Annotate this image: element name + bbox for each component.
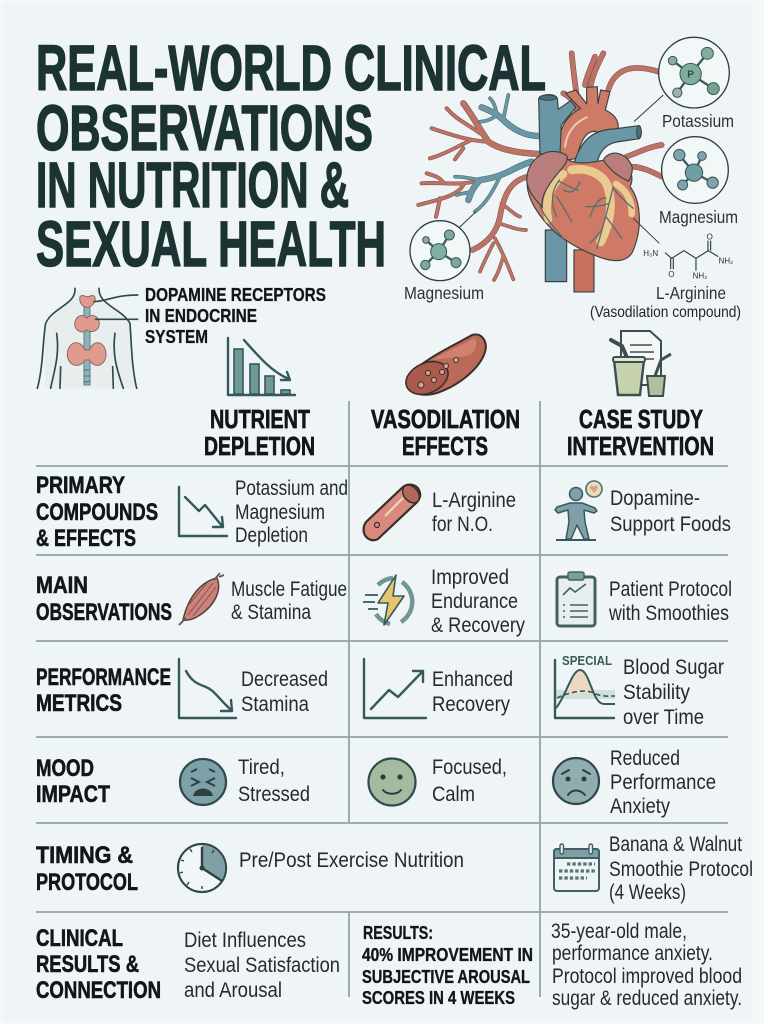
title: OBSERVATIONS (36, 92, 373, 164)
heart labels: Magnesium (404, 283, 484, 303)
pulmonary trunk (572, 126, 641, 172)
text: reduced performance anxiety: Reduced (610, 747, 680, 770)
title: IN NUTRITION & (36, 149, 349, 221)
text: improved endurance: & Recovery (431, 614, 525, 637)
row label: mood (36, 755, 110, 808)
text: focused calm: Calm (432, 783, 475, 806)
chart: enhanced recovery (364, 659, 426, 718)
column headers: DEPLETION (204, 431, 315, 461)
text: focused calm: Focused, (432, 756, 507, 779)
text: blood sugar stability: over Time (623, 706, 704, 729)
text: patient protocol: Patient Protocol (609, 578, 732, 601)
chart: decreased stamina (179, 659, 236, 718)
molecule: magnesium left (410, 221, 470, 281)
endocrine label (145, 285, 326, 347)
left atrium (527, 151, 567, 207)
chart: blood sugar curve: SPECIAL (562, 653, 612, 668)
text: potassium and magnesium: Potassium and (235, 477, 348, 500)
column headers: INTERVENTION (567, 431, 714, 461)
veins branching (455, 95, 542, 212)
heart labels: Potassium (662, 111, 734, 131)
row label: performance (36, 664, 171, 717)
text: potassium and magnesium (235, 477, 348, 547)
icon: calendar (554, 844, 599, 891)
icon: smoothies and document (611, 331, 671, 396)
molecule: potassium: P (687, 70, 694, 81)
text: reduced performance anxiety (610, 747, 716, 818)
icon: lightning ring (363, 575, 412, 625)
heart labels: L-Arginine (656, 283, 726, 303)
text: dopamine-support foods (610, 487, 731, 536)
row: mood impact (36, 747, 716, 818)
heart labels (404, 111, 741, 321)
icon: tired face (180, 759, 226, 805)
text: smoothie protocol: (4 Weeks) (609, 881, 686, 904)
text: reduced performance anxiety: Anxiety (610, 795, 670, 818)
title (36, 32, 546, 280)
text: pre/post exercise: Pre/Post Exercise Nutrition (239, 849, 464, 872)
icon: artery tube (364, 482, 423, 540)
aorta (558, 87, 618, 162)
text: improved endurance: Endurance (431, 590, 518, 613)
endocrine label: SYSTEM (145, 327, 208, 347)
row label: primary (36, 472, 158, 552)
row: timing and protocol (36, 833, 753, 904)
row: clinical results (36, 920, 742, 1010)
text: potassium and magnesium: Depletion (235, 524, 308, 547)
descending vessels (545, 230, 594, 292)
text: results callout: 40% IMPROVEMENT IN (362, 944, 533, 965)
text: results callout (362, 922, 533, 1008)
molecule: potassium (659, 37, 729, 108)
text: dopamine-support foods: Dopamine- (610, 487, 700, 510)
text: patient protocol: with Smoothies (608, 602, 729, 625)
column headers (204, 404, 714, 461)
text: muscle fatigue: & Stamina (231, 601, 311, 624)
icon: depletion chart (179, 487, 227, 536)
row: main observations (36, 566, 732, 637)
yellow fat layer (547, 169, 632, 242)
L-arginine structure: O (707, 232, 713, 241)
text: case description (551, 920, 742, 1010)
text: decreased stamina (241, 668, 328, 716)
superior vena cava (539, 95, 576, 154)
L-arginine structure: O (668, 270, 675, 279)
text: dopamine-support foods: Support Foods (610, 513, 731, 536)
text: blood sugar stability: Stability (623, 681, 690, 704)
row label: clinical (36, 925, 161, 1004)
text: diet influences: Sexual Satisfaction (184, 954, 340, 977)
row label: primary: PRIMARY (36, 472, 125, 499)
row label: performance: PERFORMANCE (36, 664, 171, 691)
row label: main: OBSERVATIONS (36, 599, 172, 626)
text: smoothie protocol (609, 833, 753, 904)
text: diet influences (184, 929, 340, 1002)
text: tired stressed (238, 756, 310, 806)
icon: worried face (553, 758, 599, 804)
text: diet influences: and Arousal (184, 979, 282, 1002)
text: improved endurance (431, 566, 525, 637)
text: tired stressed: Stressed (238, 783, 310, 806)
text: l-arginine for n.o.: L-Arginine (432, 489, 516, 512)
text: l-arginine for n.o.: for N.O. (432, 513, 493, 536)
text: results callout: SUBJECTIVE AROUSAL (362, 966, 530, 987)
L-arginine structure: NH₂ (719, 256, 733, 265)
icon: calm face (368, 758, 416, 806)
icon: person with heart bubble (555, 481, 602, 540)
row label: main: MAIN (36, 572, 88, 599)
text: improved endurance: Improved (431, 566, 509, 589)
row label: primary: & EFFECTS (36, 525, 136, 552)
text: enhanced recovery (432, 668, 513, 716)
text: results callout: SCORES IN 4 WEEKS (362, 987, 515, 1008)
leader lines (457, 95, 663, 243)
row label: timing (36, 842, 138, 896)
heart labels: Magnesium (659, 207, 738, 227)
icon: muscle (179, 573, 224, 625)
text: diet influences: Diet Influences (184, 929, 306, 952)
text: decreased stamina: Decreased (241, 668, 328, 691)
molecule: magnesium right (662, 137, 728, 203)
text: blood sugar stability (623, 656, 724, 729)
text: focused calm (432, 756, 507, 806)
text: results callout: RESULTS: (363, 922, 433, 943)
icon: endocrine body (37, 288, 138, 388)
text: muscle fatigue (231, 578, 347, 624)
L-arginine structure: H₃N (643, 249, 658, 258)
endocrine label: IN ENDOCRINE (145, 306, 257, 326)
text: decreased stamina: Stamina (241, 693, 309, 716)
text: blood sugar stability: Blood Sugar (623, 656, 724, 679)
column headers: NUTRIENT (210, 404, 310, 434)
text: tired stressed: Tired, (238, 756, 285, 779)
text: patient protocol (608, 578, 732, 625)
icon: clock (178, 844, 226, 892)
row label: clinical: RESULTS & (36, 951, 139, 978)
column headers: VASODILATION (371, 404, 520, 434)
text: muscle fatigue: Muscle Fatigue (231, 578, 347, 601)
row label: mood: IMPACT (36, 781, 110, 808)
text: potassium and magnesium: Magnesium (235, 501, 325, 524)
row label: mood: MOOD (36, 755, 94, 782)
row: performance metrics (36, 653, 724, 729)
text: enhanced recovery: Recovery (432, 693, 510, 716)
heart body (527, 154, 639, 261)
row label: primary: COMPOUNDS (36, 499, 158, 526)
heart labels: (Vasodilation compound) (590, 304, 741, 321)
right atrium (603, 153, 632, 181)
text: reduced performance anxiety: Performance (610, 771, 716, 794)
row label: clinical: CLINICAL (36, 925, 123, 952)
chart: blood sugar curve (555, 653, 615, 718)
icon: clipboard (557, 572, 595, 626)
L-arginine structure: NH₂ (693, 272, 707, 281)
row label: main (36, 572, 172, 626)
icon: blood vessel cross section (401, 334, 486, 401)
coronary vessels (540, 180, 633, 248)
text: l-arginine for n.o. (432, 489, 516, 536)
column headers: EFFECTS (402, 431, 488, 461)
row: primary compounds (36, 472, 731, 552)
row label: timing: TIMING & (36, 842, 133, 869)
heart illustration (410, 37, 733, 292)
L-arginine structure (643, 232, 733, 281)
title: SEXUAL HEALTH (36, 208, 386, 280)
row label: performance: METRICS (36, 690, 122, 717)
column headers: CASE STUDY (579, 404, 703, 434)
text: enhanced recovery: Enhanced (432, 668, 513, 691)
endocrine label: DOPAMINE RECEPTORS (145, 285, 326, 305)
row label: clinical: CONNECTION (36, 977, 161, 1004)
icon: bar chart depletion (228, 338, 295, 395)
arteries branching (418, 53, 662, 280)
text: case description: performance anxiety. (552, 942, 713, 965)
text: case description: 35-year-old male, (551, 920, 687, 943)
row label: timing: PROTOCOL (36, 869, 138, 896)
